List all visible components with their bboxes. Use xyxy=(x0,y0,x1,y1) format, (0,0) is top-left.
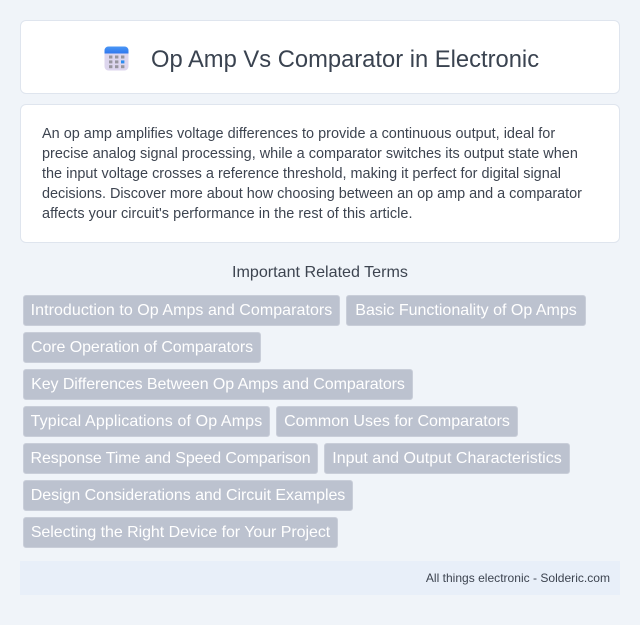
tag xyxy=(23,406,270,437)
intro text panel xyxy=(20,104,620,243)
section heading: Important Related Terms xyxy=(232,263,408,281)
tag: Response Time and Speed Comparison xyxy=(30,450,310,467)
intro paragraph: An op amp amplifies voltage differences to provide a continuous output, ideal for xyxy=(42,126,555,142)
tag: Input and Output Characteristics xyxy=(332,450,562,467)
icon: calendar xyxy=(104,46,128,70)
tag xyxy=(346,295,586,326)
intro paragraph: the input voltage crosses a reference threshold, making it perfect for digital signal xyxy=(42,166,561,182)
footer bar xyxy=(20,561,620,595)
tag xyxy=(324,443,570,474)
intro paragraph: decisions. Discover more about how choosing between an op amp and a comparator xyxy=(42,186,582,202)
tag: Design Considerations and Circuit Examples xyxy=(31,487,345,504)
header panel xyxy=(20,20,620,94)
tag xyxy=(23,443,318,474)
tag: Key Differences Between Op Amps and Comparators xyxy=(31,376,405,393)
footer text: All things electronic - Solderic.com xyxy=(426,571,610,585)
tag: Typical Applications of Op Amps xyxy=(31,413,262,430)
tag xyxy=(23,369,413,400)
title: Op Amp Vs Comparator in Electronic xyxy=(151,46,539,73)
tag: Core Operation of Comparators xyxy=(31,339,253,356)
tag xyxy=(23,332,261,363)
tag: Basic Functionality of Op Amps xyxy=(355,302,577,319)
related terms tags xyxy=(23,295,586,548)
tag: Selecting the Right Device for Your Project xyxy=(31,524,330,541)
tag xyxy=(23,517,338,548)
tag xyxy=(23,480,353,511)
tag xyxy=(23,295,340,326)
tag xyxy=(276,406,518,437)
tag: Common Uses for Comparators xyxy=(284,413,510,430)
intro paragraph: precise analog signal processing, while a comparator switches its output state when xyxy=(42,146,578,162)
intro paragraph xyxy=(42,126,582,222)
tag: Introduction to Op Amps and Comparators xyxy=(31,302,332,319)
intro paragraph: affects your circuit's performance in the rest of this article. xyxy=(42,206,413,222)
